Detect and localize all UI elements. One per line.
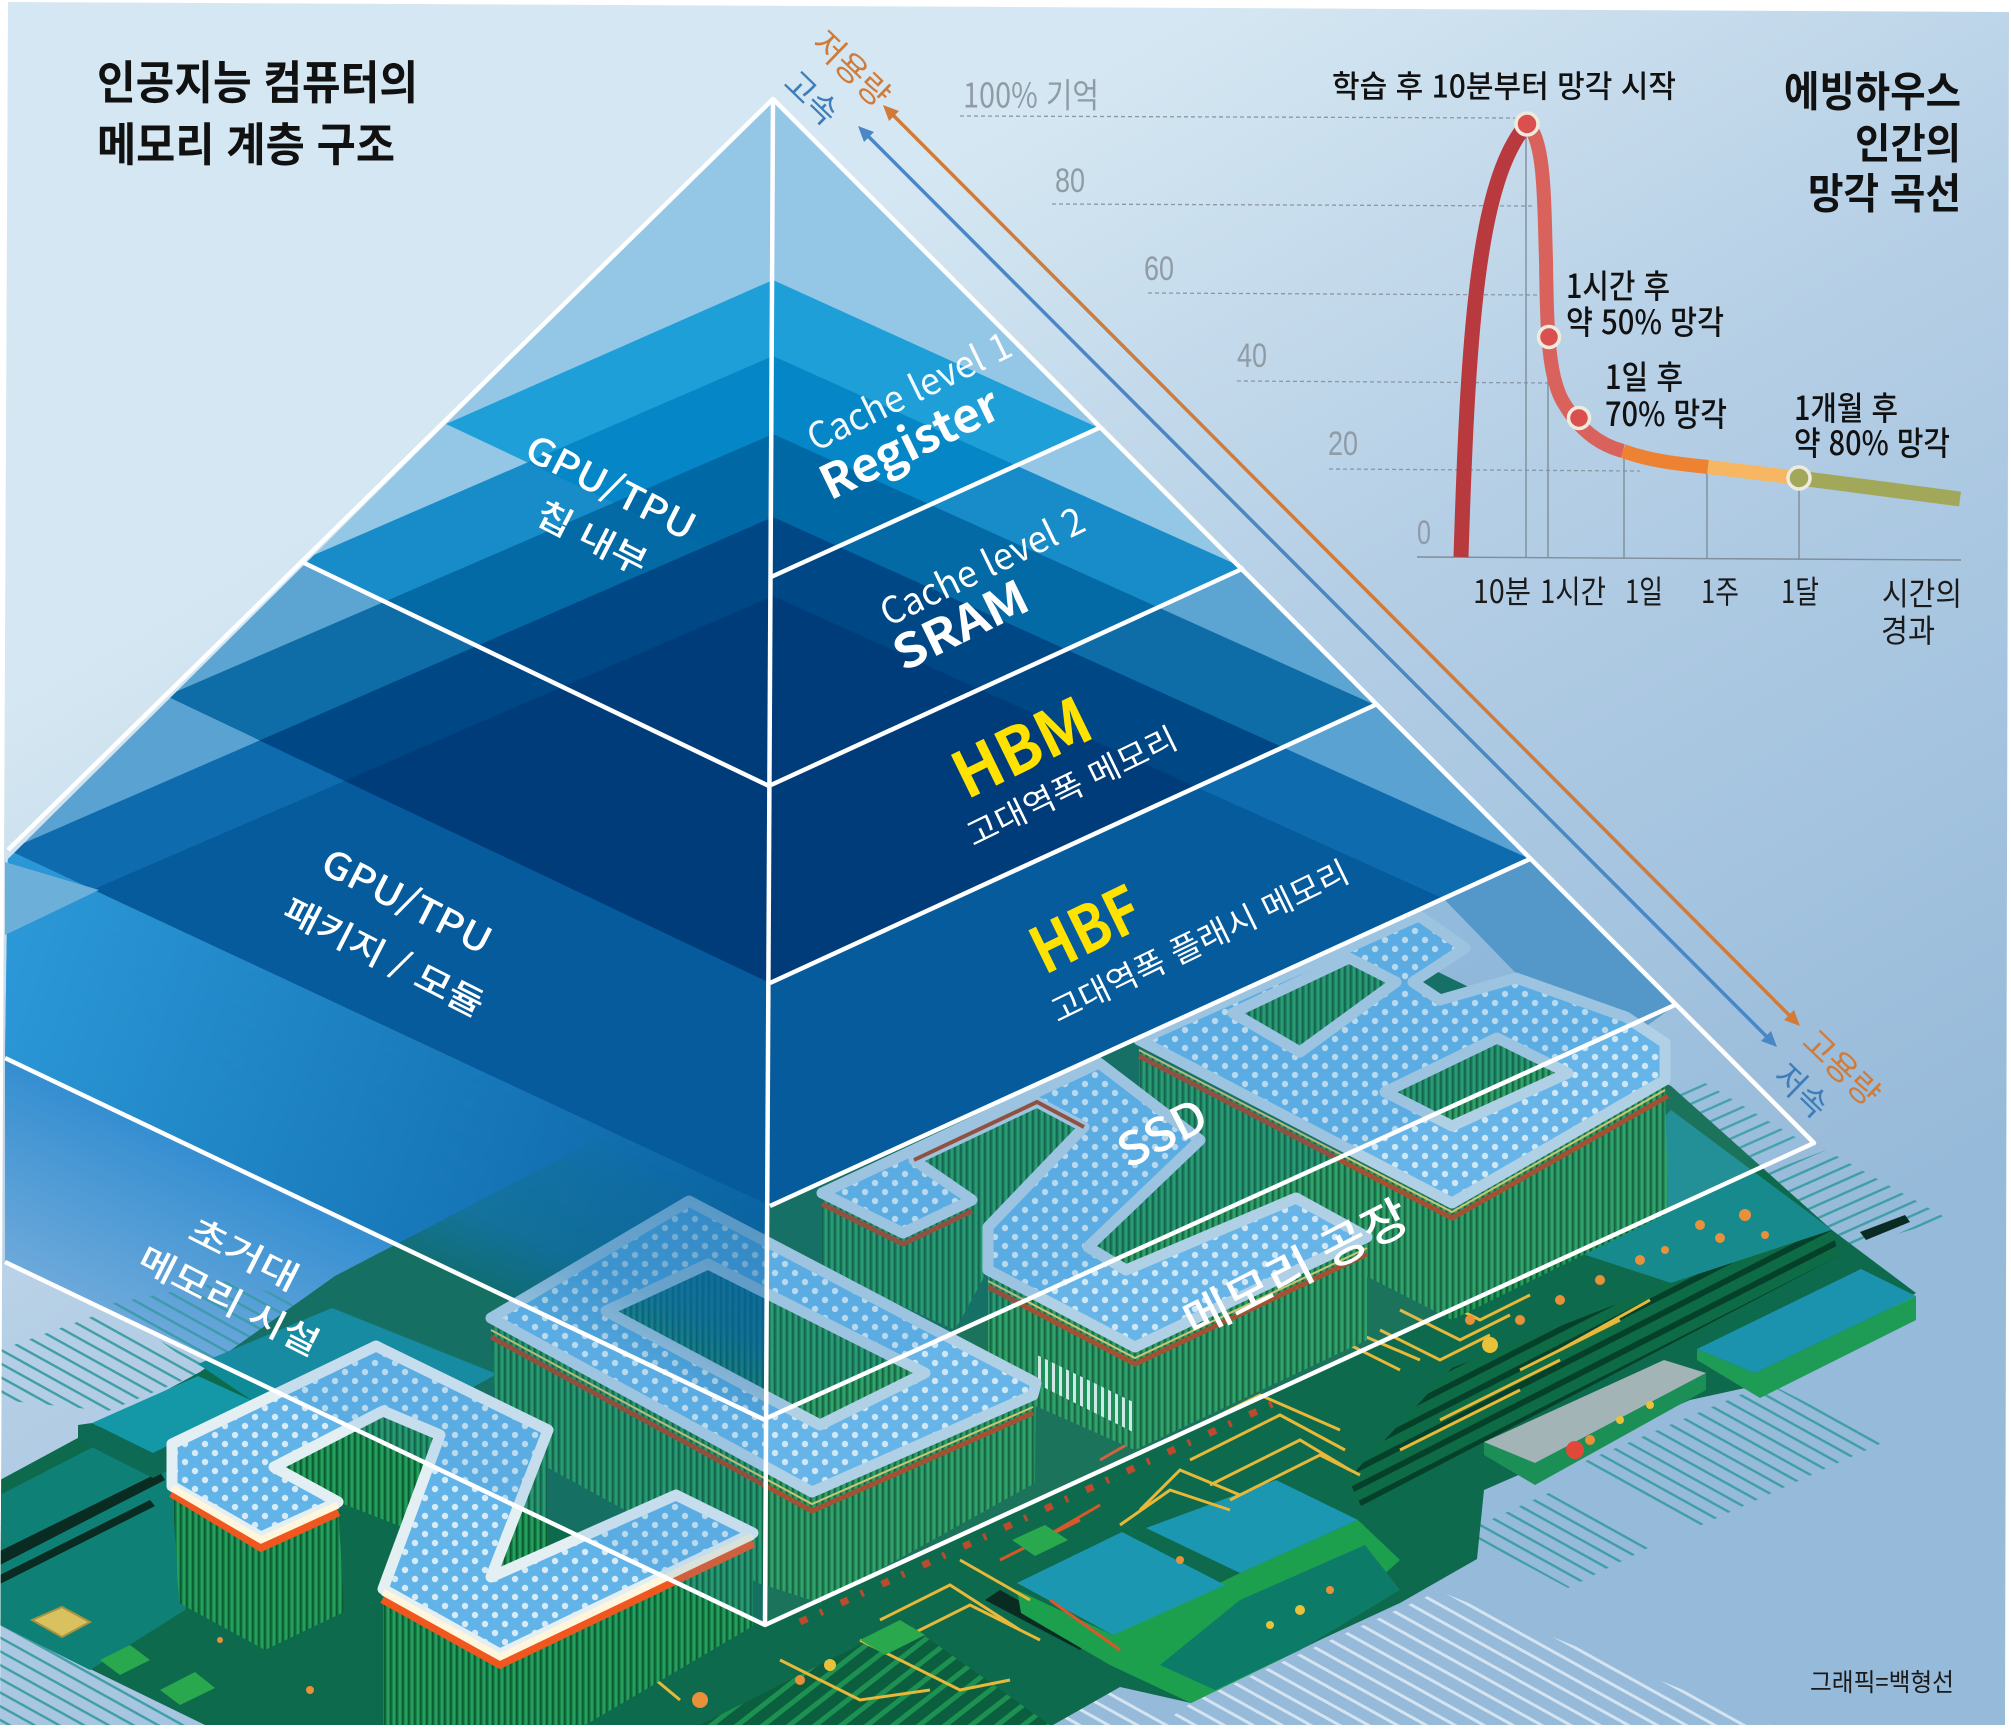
chart y labels: 0 bbox=[1417, 514, 1431, 552]
annotation: one month bbox=[1794, 382, 1950, 465]
wires: circuit board pins bbox=[0, 1080, 1948, 1725]
arrow labels: high capacity, low speed: 고용량 bbox=[1793, 1017, 1893, 1115]
board: teal trace area at the front corner bbox=[1160, 1545, 1400, 1690]
title: memory hierarchy: 인공지능 컴퓨터의 bbox=[97, 47, 418, 113]
annotation: one hour bbox=[1566, 260, 1724, 344]
board: black channels bbox=[0, 1215, 1910, 1650]
label: GPU/TPU package: 패키지 / 모듈 bbox=[276, 883, 494, 1027]
board: ridged traces bbox=[1348, 1230, 1839, 1506]
label: SSD: SSD bbox=[1104, 1080, 1218, 1182]
chart y labels: 40 bbox=[1237, 337, 1267, 375]
credit: 그래픽=백형선 bbox=[1810, 1663, 1954, 1699]
chart x labels: 경과 bbox=[1881, 606, 1935, 652]
label: GPU/TPU chip bbox=[517, 419, 707, 585]
layer: HBM diamond bbox=[166, 434, 1375, 983]
chart: Ebbinghaus forgetting curve bbox=[960, 58, 1962, 652]
right band: memory factory tint bbox=[765, 1004, 1814, 1625]
chart x labels bbox=[1473, 567, 1962, 652]
curve: after one month bbox=[1799, 478, 1960, 499]
annotation: one day: 1일 후 bbox=[1605, 351, 1683, 399]
chip: left teal bbox=[78, 1376, 255, 1478]
layer: cache level 2 diamond bbox=[300, 356, 1244, 787]
curve: learning rise bbox=[1461, 124, 1527, 557]
title: memory hierarchy bbox=[97, 47, 418, 175]
board: teal surface right bbox=[1584, 1110, 1832, 1283]
annotation: one hour: 1시간 후 bbox=[1566, 260, 1670, 308]
label: memory factory: 메모리 공장 bbox=[1170, 1181, 1420, 1351]
label: SRAM: Cache level 2 bbox=[869, 491, 1093, 637]
layer base: third band bbox=[8, 696, 1530, 1206]
pyramid: stacked memory layers bbox=[0, 99, 1814, 1625]
building: 6 bbox=[1139, 916, 1668, 1320]
chart title: 인간의 bbox=[1855, 110, 1961, 172]
chart y labels: 20 bbox=[1328, 425, 1358, 463]
building: 0 bbox=[491, 1201, 1036, 1603]
chart x labels: 1주 bbox=[1701, 567, 1739, 613]
building windows bbox=[1037, 1355, 1133, 1432]
label: HBF: 고대역폭 플래시 메모리 bbox=[1042, 848, 1356, 1032]
chart y labels: 100% 기억 bbox=[963, 68, 1099, 118]
chart x labels: 1시간 bbox=[1540, 567, 1606, 613]
building 0 roof seen through the band bbox=[491, 1201, 1036, 1492]
arrow labels: low capacity, high speed: 고속 bbox=[775, 58, 851, 134]
annotation: one month: 1개월 후 bbox=[1794, 382, 1898, 430]
left band below HBF bbox=[5, 850, 770, 1420]
layer: HBF diamond bbox=[8, 517, 1530, 1206]
board: teal surface left bbox=[0, 1435, 187, 1670]
arrow labels: low capacity, high speed: 저용량 bbox=[803, 18, 903, 116]
chip: teal center bbox=[1146, 1480, 1358, 1573]
building: 2 (first) bbox=[172, 1346, 753, 1733]
label: GPU/TPU chip: 칩 내부 bbox=[528, 487, 658, 585]
board: green stripes in front bbox=[700, 1622, 1050, 1725]
right band: SSD tint bbox=[767, 859, 1677, 1418]
chart y labels bbox=[963, 68, 1431, 552]
board: small green components bbox=[100, 1525, 1068, 1705]
chip: silver bbox=[1484, 1360, 1706, 1485]
label: HBF: HBF bbox=[1013, 860, 1155, 992]
label: GPU/TPU package: GPU/TPU bbox=[313, 833, 503, 965]
arrow labels: high capacity, low speed: 저속 bbox=[1765, 1051, 1841, 1127]
label: HBM bbox=[935, 671, 1184, 856]
layer: HBF over HBM bbox=[8, 517, 1530, 1206]
chip: front board under teal blocks bbox=[1017, 1520, 1400, 1703]
label: HBM: HBM bbox=[935, 671, 1105, 817]
traces: gold and orange bbox=[420, 1290, 1650, 1700]
layer base: second band bbox=[166, 561, 1375, 983]
annotation: one day bbox=[1605, 351, 1727, 436]
annotation: one hour: 약 50% 망각 bbox=[1566, 296, 1724, 344]
chip: back left bbox=[198, 1308, 497, 1460]
curve: one week to one month bbox=[1708, 467, 1799, 478]
chart x labels: 시간의 bbox=[1882, 569, 1962, 615]
board: red solder along the base line bbox=[800, 1396, 1290, 1622]
label: GPU/TPU package bbox=[276, 833, 503, 1027]
label: register: Register bbox=[806, 366, 1010, 513]
chart y labels: 80 bbox=[1055, 162, 1085, 200]
label: register: Cache level 1 bbox=[796, 316, 1020, 462]
circuit board bbox=[0, 972, 1916, 1725]
building: 2 (second) bbox=[822, 1063, 1367, 1450]
annotation: one day: 70% 망각 bbox=[1605, 388, 1727, 436]
chart axis and tick lines bbox=[1417, 130, 1961, 560]
left corner light strip bbox=[5, 862, 99, 935]
chip: teal front bbox=[1017, 1532, 1225, 1635]
curve: rapid forgetting bbox=[1527, 124, 1623, 451]
illustration: circuit board city with 2026 buildings bbox=[0, 880, 1948, 1733]
layer: SSD diamond, upper part bbox=[0, 596, 1677, 1420]
chart title: 에빙하우스 bbox=[1784, 58, 1961, 120]
label: GPU/TPU chip: GPU/TPU bbox=[517, 419, 707, 551]
solder dots bbox=[217, 1209, 1769, 1708]
annotation: one month: 약 80% 망각 bbox=[1794, 417, 1950, 465]
label: ultra large memory: 초거대 bbox=[181, 1203, 309, 1301]
chip: gold bbox=[32, 1607, 90, 1637]
left band: ultra large memory tint bbox=[5, 1058, 765, 1625]
chart x labels: 10분 bbox=[1473, 567, 1531, 613]
label: ultra large memory: 메모리 시설 bbox=[131, 1232, 329, 1366]
label: ultra large memory bbox=[131, 1203, 329, 1366]
chart title bbox=[1784, 58, 1961, 222]
arrow: speed, blue bbox=[858, 126, 1777, 1047]
title: memory hierarchy: 메모리 계층 구조 bbox=[97, 109, 395, 175]
arrow: capacity, orange bbox=[883, 105, 1800, 1026]
chart x labels: 1달 bbox=[1781, 567, 1819, 613]
curve: one day to one week bbox=[1623, 451, 1708, 467]
pyramid lower bands behind the board bbox=[5, 853, 1672, 1358]
arrow labels: high capacity, low speed bbox=[1765, 1017, 1893, 1127]
chart x labels: 1일 bbox=[1625, 567, 1663, 613]
layer: cache level 1 diamond bbox=[446, 280, 1099, 577]
label: HBM: 고대역폭 메모리 bbox=[958, 714, 1184, 856]
chart y labels: 60 bbox=[1144, 250, 1174, 288]
curve points bbox=[1516, 113, 1810, 489]
chart title: 망각 곡선 bbox=[1808, 160, 1961, 222]
chip: right teal bbox=[1697, 1269, 1916, 1398]
chart grid lines bbox=[960, 116, 1640, 471]
pyramid outlines bbox=[5, 99, 1814, 1625]
arrow labels: low capacity, high speed bbox=[775, 18, 903, 134]
annotation: peak: 학습 후 10분부터 망각 시작 bbox=[1332, 62, 1676, 106]
layer base: top silhouette bbox=[300, 99, 1244, 787]
label: SRAM: SRAM bbox=[879, 559, 1039, 685]
